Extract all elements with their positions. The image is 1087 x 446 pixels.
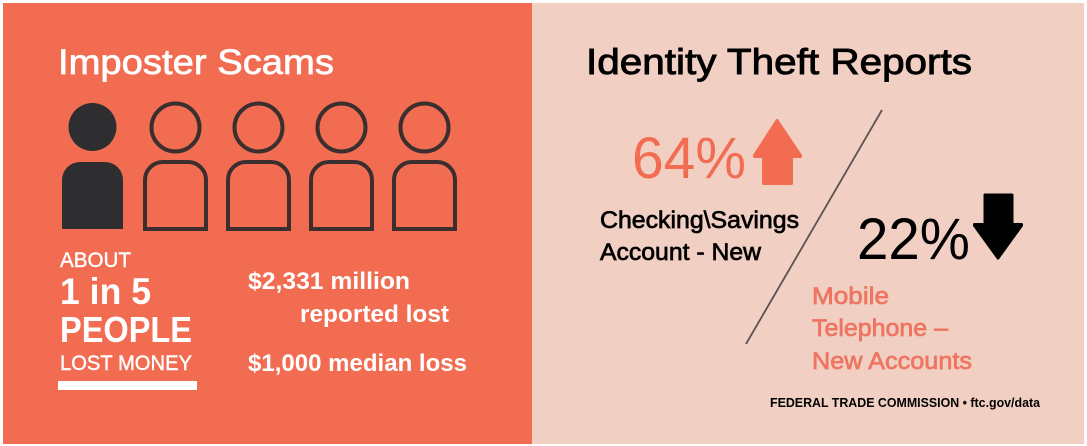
icon: row of five people, one filled <box>62 103 455 229</box>
label: mobile telephone: Telephone – <box>812 315 949 342</box>
callout: about 1 in 5 people lost money: ABOUT <box>60 249 131 272</box>
text block: loss statistics <box>248 268 467 377</box>
heading: identity theft reports: Identity Theft Reports <box>586 41 972 82</box>
callout: about 1 in 5 people lost money <box>58 249 197 390</box>
divider line <box>746 110 882 344</box>
label: checking and savings <box>600 207 799 266</box>
heading: imposter scams: Imposter Scams <box>58 43 334 82</box>
source credit: FEDERAL TRADE COMMISSION • ftc.gov/data <box>770 396 1041 410</box>
label: mobile telephone: New Accounts <box>812 348 972 375</box>
callout: about 1 in 5 people lost money: LOST MONEY <box>60 352 192 375</box>
stat: 64 percent: 64% <box>632 126 746 191</box>
icon: outlined person 3 <box>228 104 289 229</box>
text block: loss statistics: $2,331 million <box>248 268 410 295</box>
label: mobile telephone: Mobile <box>812 283 889 310</box>
panel: imposter scams <box>3 3 532 444</box>
text block: loss statistics: $1,000 median loss <box>248 350 467 377</box>
icon: up arrow <box>754 120 800 184</box>
label: mobile telephone <box>812 283 972 375</box>
label: checking and savings: Checking\Savings <box>600 207 799 234</box>
label: checking and savings: Account - New <box>600 239 762 266</box>
callout: about 1 in 5 people lost money: 1 in 5 <box>60 271 151 312</box>
text block: loss statistics: reported lost <box>300 301 449 328</box>
icon: outlined person 4 <box>311 104 372 229</box>
icon: down arrow <box>974 195 1022 258</box>
panel: identity theft reports <box>532 3 1084 444</box>
stat: 22 percent: 22% <box>857 207 970 272</box>
icon: filled person <box>62 103 123 229</box>
icon: outlined person 5 <box>394 104 455 229</box>
icon: outlined person 2 <box>145 104 206 229</box>
callout: about 1 in 5 people lost money: PEOPLE <box>60 309 192 350</box>
